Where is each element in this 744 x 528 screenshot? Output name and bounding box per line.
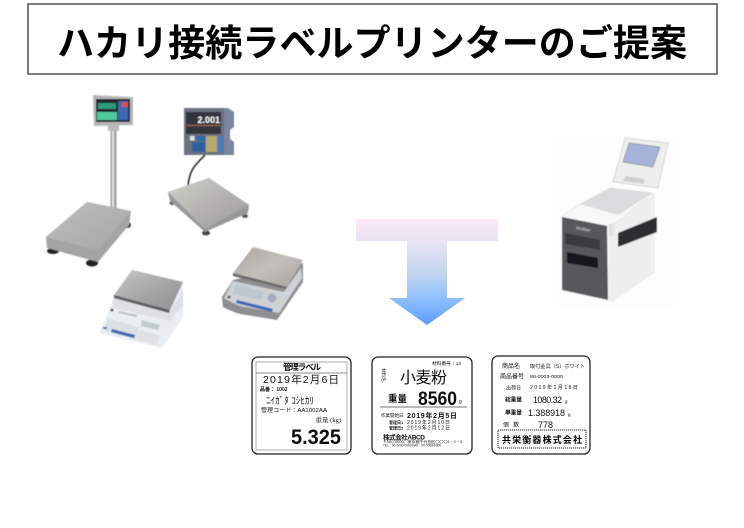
icon: label printer: brother (576, 225, 591, 233)
icon: label printer (558, 136, 674, 308)
label sample 3: 2019年1月18日 (530, 383, 578, 391)
icon: bench scale with indicator: 2.001 (197, 115, 220, 125)
label sample 2 (372, 357, 472, 454)
label sample 2: 2019年2月5日 (407, 411, 457, 420)
label sample 3: 1080.32 (533, 395, 562, 405)
label 2 weight caption: 重量 (388, 393, 408, 405)
label 3 product name: 商品名 (502, 362, 520, 370)
label 1 item number: 品番： 1002 (260, 386, 288, 393)
label 2 company: 株式会社ABCD (383, 432, 425, 442)
label sample 3: 取付金具（S）ホワイト (530, 362, 585, 370)
label sample 3: 1.388918 (528, 408, 565, 418)
arrow pointing down (356, 219, 498, 325)
label sample 3: 778 (538, 420, 553, 430)
label 3 product number: 商品番号 (500, 372, 524, 380)
label 3 company name: 共栄衡器株式会社 (502, 434, 582, 445)
icon: silver compact balance (222, 247, 303, 320)
label 1 heading: 管理ラベル (283, 362, 321, 372)
title box (28, 4, 717, 74)
label 2 address: 〒000-0000、東京都千代田区〇〇〇1－2－3 (383, 439, 462, 444)
label 1 item name: ﾆｲｶﾞﾀ ｺｼﾋｶﾘ (266, 396, 314, 407)
label sample 3: g (568, 412, 571, 417)
label 1 weight caption: 重量 (kg) (316, 415, 341, 424)
label 2 weight value: 8560 (418, 389, 457, 410)
label 3 quantity: 個 数 (503, 420, 519, 428)
label 1 code: 管理コード：AA1002AA (261, 406, 327, 414)
label 3 total weight: 総重量 (505, 396, 522, 404)
icon: bench scale with indicator (168, 108, 249, 236)
label 2 material name: 小麦粉 (400, 369, 447, 387)
label 1 weight value: 5.325 (291, 426, 341, 449)
label 3 ship date: 出荷日 (506, 384, 521, 392)
label 2 material number: 材料番号：13 (432, 360, 461, 367)
label sample 2: 2019年2月10日 (407, 419, 450, 426)
label sample 2: 2019年2月12日 (407, 424, 450, 432)
label 2 phone: TEL：00-0000-0000 FAX：00-0000-0000 (383, 444, 441, 448)
label sample 3: g (565, 399, 568, 404)
icon: platform scale with pole (46, 95, 133, 266)
title text: ハカリ接続ラベルプリンターのご提案 (57, 23, 687, 64)
label 2 deadline 2: 管理日2 (389, 424, 404, 430)
label sample 1 (252, 357, 351, 454)
label sample 3 (492, 356, 590, 454)
label 2 start date: 作業開始日 (381, 412, 404, 419)
label 2 deadline 1: 管理日1 (389, 419, 404, 425)
label sample 3: 88-0003-0000 (530, 374, 563, 380)
label 2 unit: g (459, 399, 462, 405)
label 1 date: 2019年2月6日 (263, 373, 339, 386)
label 3 unit weight: 単重量 (505, 408, 522, 416)
label 2 material caption: 材料名 (380, 368, 387, 382)
icon: white precision balance (99, 270, 183, 348)
